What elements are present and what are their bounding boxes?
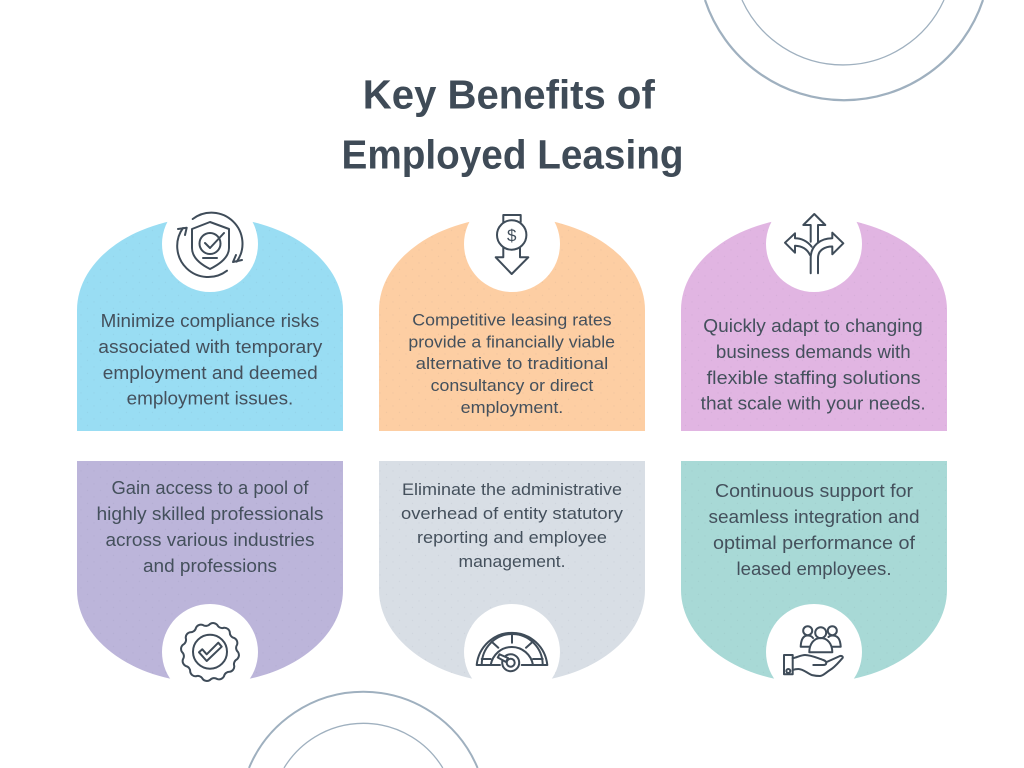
text: rates: employment.: [461, 398, 563, 417]
text: flexibility: Quickly adapt to changing: [703, 315, 923, 336]
panel shape: [379, 217, 645, 431]
panel shape: [681, 217, 947, 431]
text: support: seamless integration and: [708, 506, 920, 527]
icon: dollar down arrow: $: [507, 226, 517, 245]
panel: support: [681, 461, 947, 700]
panel shape: [77, 217, 343, 431]
text: support: leased employees.: [736, 558, 892, 579]
text: talent: and professions: [143, 555, 277, 576]
text: compliance: employment and deemed: [103, 362, 318, 383]
text: flexibility: [701, 315, 926, 414]
title: [342, 72, 684, 178]
text: compliance: Minimize compliance risks: [101, 310, 319, 331]
decorative circles: top right: [705, 0, 983, 100]
panel: administration: [379, 461, 645, 700]
text: talent: Gain access to a pool of: [112, 477, 309, 498]
text: compliance: associated with temporary: [98, 336, 323, 357]
text: rates: provide a financially viable: [408, 332, 615, 351]
icon circle: [464, 196, 560, 292]
icon circle: [162, 604, 258, 700]
text: compliance: [98, 310, 323, 408]
panel: talent: [77, 461, 343, 700]
text: rates: [408, 311, 615, 417]
text: talent: [96, 477, 324, 576]
icon: speedometer gauge: [477, 633, 547, 671]
text: administration: [401, 480, 624, 571]
text: support: [708, 480, 920, 579]
title: Key Benefits of: [363, 72, 655, 118]
icon circle: [162, 196, 258, 292]
icon circle: [766, 604, 862, 700]
panel shape: [379, 461, 645, 683]
panel: rates: [379, 196, 645, 431]
icon circle: [464, 604, 560, 700]
text: rates: Competitive leasing rates: [412, 311, 612, 330]
text: administration: overhead of entity statutory: [401, 504, 624, 523]
text: support: optimal performance of: [713, 532, 916, 553]
icon: three-way arrows: [785, 214, 843, 273]
panel shape: [681, 461, 947, 683]
text: flexibility: flexible staffing solutions: [707, 367, 921, 388]
text: administration: Eliminate the administrative: [402, 480, 622, 499]
text: rates: alternative to traditional: [416, 354, 608, 373]
panel: flexibility: [681, 196, 947, 431]
panel shape: [77, 461, 343, 683]
text: support: Continuous support for: [715, 480, 913, 501]
panel: compliance: [77, 196, 343, 431]
text: flexibility: business demands with: [716, 341, 911, 362]
decorative circles: bottom: [249, 692, 478, 768]
text: talent: across various industries: [106, 529, 314, 550]
icon: hand holding people: [784, 626, 843, 676]
icon: dollar down arrow: [496, 215, 528, 274]
title: Employed Leasing: [342, 132, 684, 178]
text: talent: highly skilled professionals: [96, 503, 324, 524]
icon: badge with check: [181, 623, 239, 681]
text: administration: management.: [458, 552, 566, 571]
text: flexibility: that scale with your needs.: [701, 392, 926, 414]
icon circle: [766, 196, 862, 292]
text: rates: consultancy or direct: [431, 376, 594, 395]
text: administration: reporting and employee: [417, 528, 607, 547]
text: compliance: employment issues.: [127, 388, 293, 408]
icon: shield with check: [177, 213, 242, 277]
